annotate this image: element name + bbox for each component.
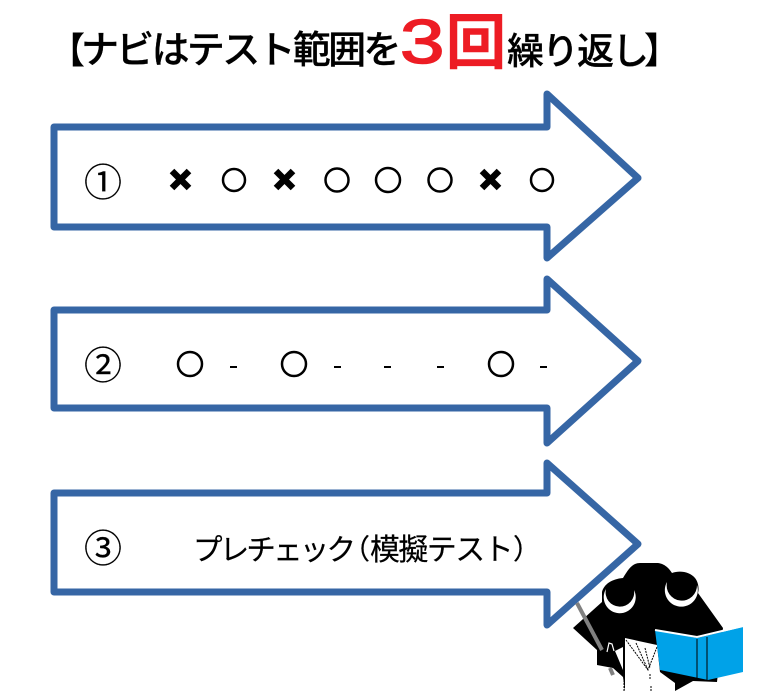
row 2 marks [178,352,547,376]
coat sleeve gap [615,647,623,670]
mark: dash [540,366,547,368]
mark: cross [276,171,293,188]
row 1 marks [172,168,553,192]
eye: left [604,589,636,613]
book [655,626,743,680]
row 3 label: 模擬テスト [370,534,512,567]
mark: circle [376,168,400,192]
coat [625,638,675,691]
row 2 number: ② [84,346,122,388]
title: 3 [400,8,444,77]
row 3 label [193,534,541,567]
mark: dash [384,366,391,368]
title: ナビはテスト範囲を [81,30,399,72]
title [49,8,680,77]
row 1 number: ① [84,163,122,205]
mark: circle [428,168,452,192]
mark: dash [437,366,444,368]
mark: circle [326,168,348,192]
mark: circle [531,169,553,191]
mark: dash [334,366,341,368]
row 3 label: プレチェック [193,534,353,567]
mark: circle [282,352,306,376]
mark: cross [172,171,189,188]
title: 【 [49,30,85,71]
hand highlight [607,643,614,652]
mark: cross [482,171,499,188]
arrow 3 [54,463,638,625]
mark: circle [489,352,513,376]
eye: right [665,582,698,607]
row 3 label: ） [513,534,541,565]
row 3 label: （ [342,534,370,565]
arrow 2 [54,279,638,443]
title: 回 [446,10,506,76]
arrow 1 [54,94,638,258]
mascot reading a book [573,563,743,691]
body [573,563,723,691]
row 3 number: ③ [84,529,122,571]
title: 繰り返し [507,31,647,72]
mark: dash [230,366,237,368]
coat lines [624,638,657,691]
mark: circle [178,352,202,376]
pointer stick [577,603,613,675]
title: 】 [644,30,680,71]
mark: circle [223,169,245,191]
